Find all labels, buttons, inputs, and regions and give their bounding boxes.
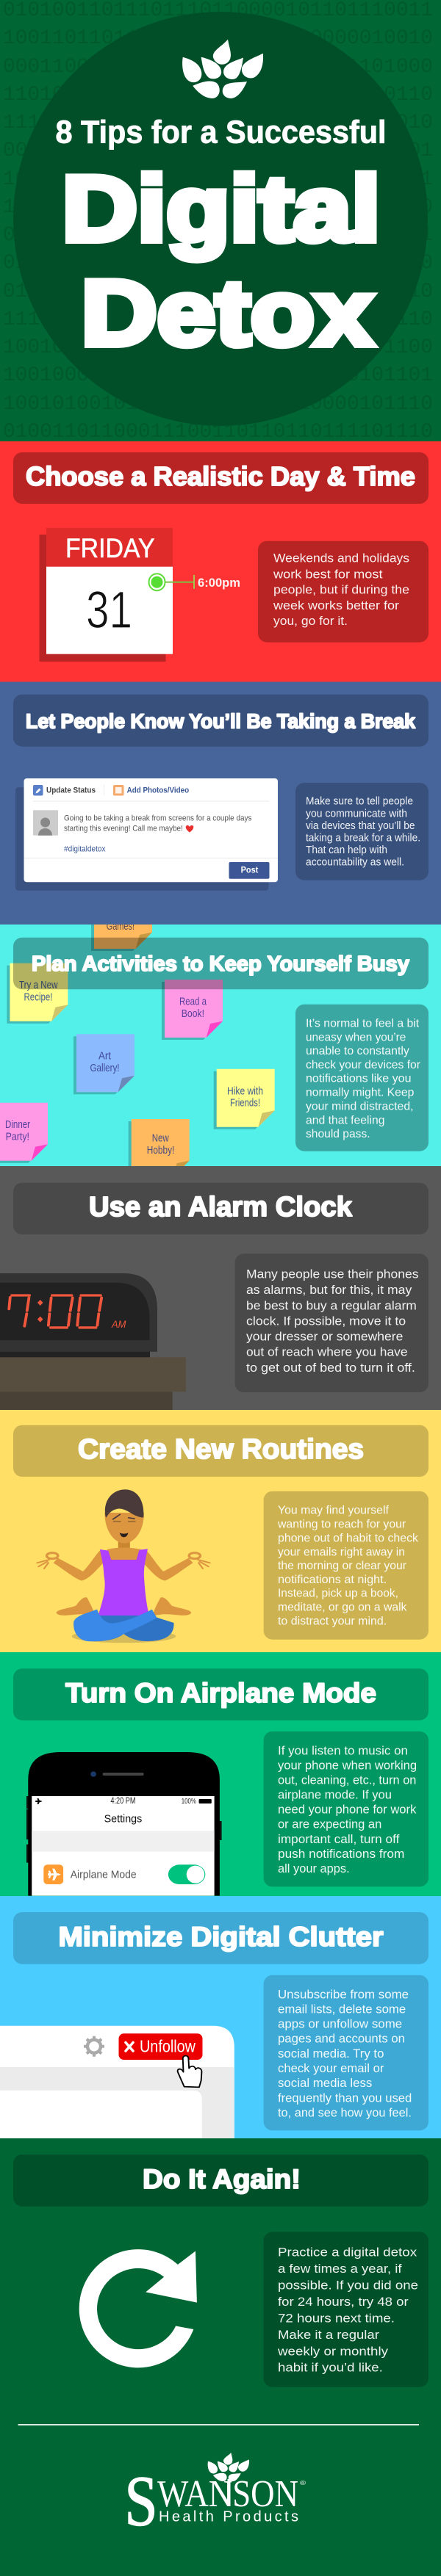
calendar icon: FRIDAY bbox=[65, 533, 154, 563]
sticky: hike with friends bbox=[214, 1069, 275, 1129]
sticky: art gallery bbox=[74, 1034, 135, 1094]
heading bar bbox=[13, 452, 429, 504]
sticky: read a book: Read a bbox=[179, 995, 207, 1007]
text box: push notifications from bbox=[278, 1847, 404, 1861]
text box: social media less bbox=[278, 2076, 372, 2090]
status update card: starting this evening! Call me maybe! bbox=[64, 825, 183, 833]
text box: your mind distracted, bbox=[306, 1100, 413, 1112]
text box: your phone when working bbox=[278, 1758, 417, 1772]
text box: notifications at night. bbox=[278, 1574, 387, 1586]
sticky: games bbox=[91, 925, 152, 951]
panel: turn on airplane mode bbox=[0, 1652, 441, 1896]
text box: your emails right away in bbox=[278, 1546, 405, 1558]
panel: hero header bbox=[0, 0, 441, 444]
icon: gear bbox=[84, 2036, 104, 2057]
sticky: try a new recipe: Try a New bbox=[19, 979, 58, 991]
alarm clock on table bbox=[0, 1273, 186, 1410]
text box: Practice a digital detox bbox=[278, 2246, 417, 2260]
binary code background: 00110100101101001011010010110100101 bbox=[3, 140, 433, 162]
text box: you communicate with bbox=[306, 808, 407, 820]
binary code background: 10010110100101101001011010010110101 bbox=[3, 168, 433, 191]
binary code background: 10010101101001011010010110100101100 bbox=[3, 336, 433, 359]
text box: should pass. bbox=[306, 1128, 370, 1140]
heading bar bbox=[13, 2154, 429, 2207]
text box: It’s normal to feel a bit bbox=[306, 1017, 420, 1030]
heading bar: Do It Again! bbox=[143, 2164, 301, 2194]
binary code background: 11101001011010010110100101101001110 bbox=[3, 308, 433, 331]
sticky: read a book: Book! bbox=[182, 1007, 204, 1020]
calendar icon: 31 bbox=[86, 582, 132, 640]
text box: for 24 hours, try 48 or bbox=[278, 2295, 409, 2309]
text box: check your devices for bbox=[306, 1059, 421, 1071]
text box: Many people use their phones bbox=[246, 1267, 419, 1281]
text box: meditate, or go on a walk bbox=[278, 1602, 407, 1614]
calendar icon bbox=[40, 528, 173, 662]
panel: create new routines bbox=[0, 1410, 441, 1652]
text box: people, but if during the bbox=[273, 582, 409, 596]
title: Detox: Detox bbox=[81, 261, 373, 364]
heading bar: Choose a Realistic Day & Time bbox=[26, 461, 415, 491]
sticky: hike with friends: Friends! bbox=[230, 1097, 260, 1110]
heading bar bbox=[13, 938, 429, 989]
text box: you, go for it. bbox=[273, 614, 348, 628]
text box: weekly or monthly bbox=[277, 2345, 389, 2359]
illustration: browser window with unfollow button: Unfollow bbox=[140, 2036, 196, 2055]
text box: email lists, delete some bbox=[278, 2002, 406, 2016]
text box: Make it a regular bbox=[278, 2328, 379, 2342]
heading bar: Turn On Airplane Mode bbox=[65, 1678, 376, 1708]
time marker bbox=[148, 574, 240, 590]
sticky: games: Games! bbox=[107, 920, 135, 933]
binary code background: 00011001010010110100101101011101000 bbox=[3, 56, 433, 79]
text box: unable to constantly bbox=[306, 1045, 409, 1057]
icon: leaves logo bbox=[182, 40, 263, 98]
text box: habit if you’d like. bbox=[278, 2361, 383, 2375]
binary code background: 11101001011010010110100101101001010 bbox=[3, 112, 433, 134]
alarm clock on table: AM bbox=[111, 1318, 126, 1330]
text box: Weekends and holidays bbox=[273, 551, 409, 565]
text box: uneasy when you’re bbox=[306, 1031, 406, 1043]
text box: a few times a year, if bbox=[278, 2262, 402, 2276]
heading bar: Use an Alarm Clock bbox=[89, 1192, 353, 1223]
illustration: phone with settings: Airplane Mode bbox=[71, 1868, 137, 1881]
binary code background: 10110100101101001011010010110100110 bbox=[3, 196, 433, 219]
title: Digital: Digital bbox=[62, 157, 381, 260]
sticky: art gallery: Art bbox=[98, 1050, 112, 1063]
text box bbox=[258, 541, 429, 643]
text box: 72 hours next time. bbox=[278, 2312, 395, 2326]
logo: Swanson Health Products bbox=[125, 2453, 306, 2541]
illustration: phone with settings: 4:20 PM bbox=[110, 1795, 135, 1806]
text box: important call, turn off bbox=[278, 1832, 400, 1846]
text box bbox=[264, 1491, 429, 1640]
text box bbox=[235, 1253, 429, 1392]
text box: social media. Try to bbox=[278, 2047, 384, 2061]
text box: airplane mode. If you bbox=[278, 1788, 392, 1802]
subtitle: 8 Tips for a Successful bbox=[56, 115, 387, 150]
text box: to get out of bed to turn it off. bbox=[246, 1361, 415, 1375]
binary code background: 10010001011010010110100101100101101 bbox=[3, 364, 433, 387]
text box: all your apps. bbox=[278, 1862, 350, 1875]
binary code background: 01011010010110100101101001011010010 bbox=[3, 281, 433, 303]
heading bar bbox=[13, 1668, 429, 1721]
panel: do it again bbox=[0, 2138, 441, 2576]
binary code background: 01001101100011100110110110111101110 bbox=[3, 421, 433, 444]
logo: Swanson Health Products: WANSON bbox=[157, 2473, 298, 2515]
text box bbox=[264, 1975, 429, 2130]
text box: wanting to reach for your bbox=[277, 1519, 406, 1531]
text box: via devices that you’ll be bbox=[306, 820, 415, 832]
panel: let people know bbox=[0, 681, 441, 925]
illustration: phone with settings bbox=[26, 1752, 222, 1896]
clock digits bbox=[9, 1295, 101, 1328]
text box: need your phone for work bbox=[278, 1803, 417, 1817]
text box: phone out of habit to check bbox=[278, 1532, 419, 1544]
sticky: dinner party: Party! bbox=[6, 1131, 29, 1143]
text box: work best for most bbox=[273, 567, 383, 581]
status update card: Update Status bbox=[46, 786, 96, 795]
heading bar bbox=[13, 695, 429, 747]
text box: frequently than you used bbox=[278, 2091, 412, 2105]
icon: circular arrow bbox=[79, 2249, 197, 2367]
text box: Unsubscribe from some bbox=[278, 1988, 409, 2002]
heading bar: Minimize Digital Clutter bbox=[59, 1922, 384, 1952]
heading bar: Create New Routines bbox=[78, 1434, 364, 1465]
heading bar: Let People Know You’ll Be Taking a Break bbox=[26, 709, 415, 733]
text box: be best to buy a regular alarm bbox=[246, 1298, 417, 1312]
sticky: dinner party bbox=[0, 1103, 48, 1163]
logo: Swanson Health Products: Health Products bbox=[159, 2509, 298, 2525]
sticky: new hobby: New bbox=[152, 1132, 169, 1145]
logo: Swanson Health Products: S bbox=[125, 2462, 157, 2541]
sticky: read a book bbox=[162, 980, 223, 1040]
sticky: try a new recipe bbox=[7, 963, 68, 1024]
text box: Make sure to tell people bbox=[306, 796, 413, 808]
binary code background: 11010110100101101001011010100100110 bbox=[3, 84, 433, 106]
sticky: try a new recipe: Recipe! bbox=[24, 991, 53, 1004]
status update card: Add Photos/Video bbox=[127, 786, 189, 795]
text box: week works better for bbox=[273, 598, 399, 612]
text box: normally might. Keep bbox=[306, 1087, 414, 1099]
heading bar bbox=[13, 1425, 429, 1477]
text box: You may find yourself bbox=[278, 1505, 389, 1517]
logo: Swanson Health Products: ® bbox=[300, 2480, 306, 2486]
text box: possible. If you did one bbox=[278, 2279, 418, 2293]
sticky: new hobby: Hobby! bbox=[147, 1144, 174, 1157]
status update card: Going to be taking a break from screens for a couple days bbox=[64, 814, 252, 823]
text box: and that feeling bbox=[306, 1114, 385, 1126]
binary code background: 10010100101101001011010010000101110 bbox=[3, 393, 433, 416]
text box: accountability as well. bbox=[306, 857, 404, 869]
illustration: phone with settings: Settings bbox=[104, 1813, 142, 1826]
sticky: hike with friends: Hike with bbox=[227, 1085, 263, 1098]
text box: If you listen to music on bbox=[278, 1743, 408, 1757]
panel: minimize digital clutter bbox=[0, 1896, 441, 2138]
text box: your dresser or somewhere bbox=[246, 1330, 403, 1344]
illustration: meditating woman bbox=[37, 1489, 209, 1643]
text box: apps or unfollow some bbox=[278, 2017, 402, 2031]
time marker: 6:00pm bbox=[198, 576, 240, 590]
sticky: art gallery: Gallery! bbox=[90, 1062, 119, 1074]
sticky: dinner party: Dinner bbox=[5, 1118, 30, 1131]
binary code background bbox=[3, 0, 433, 444]
text box: out, cleaning, etc., turn on bbox=[278, 1773, 416, 1787]
text box: notifications like you bbox=[306, 1073, 412, 1085]
status update card: Post bbox=[241, 865, 258, 875]
text box bbox=[295, 1005, 429, 1151]
text box: as alarms, but for this, it may bbox=[246, 1283, 412, 1297]
status update card bbox=[15, 778, 278, 891]
text box: check your email or bbox=[278, 2061, 384, 2075]
status update card: #digitaldetox bbox=[64, 844, 106, 853]
text box bbox=[264, 2232, 429, 2387]
text box: to distract your mind. bbox=[278, 1615, 387, 1627]
text box bbox=[295, 783, 429, 880]
heading bar bbox=[13, 1912, 429, 1964]
text box: to, and see how you feel. bbox=[278, 2105, 412, 2119]
sticky: new hobby bbox=[128, 1119, 190, 1166]
icon: logo leaves bbox=[208, 2453, 249, 2481]
text box: or are expecting an bbox=[278, 1817, 381, 1831]
text box: taking a break for a while. bbox=[306, 832, 420, 844]
sticky notes bbox=[0, 925, 275, 1166]
text box: Instead, pick up a book, bbox=[278, 1588, 398, 1600]
heading bar: Plan Activities to Keep Yourself Busy bbox=[32, 952, 409, 976]
binary code background: 01101001011010010110100101101001011 bbox=[3, 224, 433, 247]
text box: clock. If possible, move it to bbox=[246, 1314, 406, 1328]
binary code background: 10011011011011000111010000000010010 bbox=[3, 27, 433, 50]
panel: plan activities bbox=[0, 925, 441, 1166]
illustration: phone with settings: 100% bbox=[182, 1798, 196, 1806]
text box: out of reach where you have bbox=[246, 1345, 407, 1359]
text box: the morning or clear your bbox=[278, 1560, 407, 1572]
panel: choose a realistic day and time bbox=[0, 441, 441, 682]
text box: That can help with bbox=[306, 844, 387, 856]
icon: hand cursor bbox=[178, 2056, 201, 2087]
heading bar bbox=[13, 1183, 429, 1234]
text box bbox=[264, 1732, 429, 1886]
binary code background: 01001011010010110100101101001011010 bbox=[3, 252, 433, 275]
text box: pages and accounts on bbox=[278, 2032, 405, 2046]
panel: use an alarm clock bbox=[0, 1166, 441, 1410]
dark green circle bbox=[13, 12, 428, 426]
illustration: browser window with unfollow button bbox=[0, 2026, 234, 2138]
